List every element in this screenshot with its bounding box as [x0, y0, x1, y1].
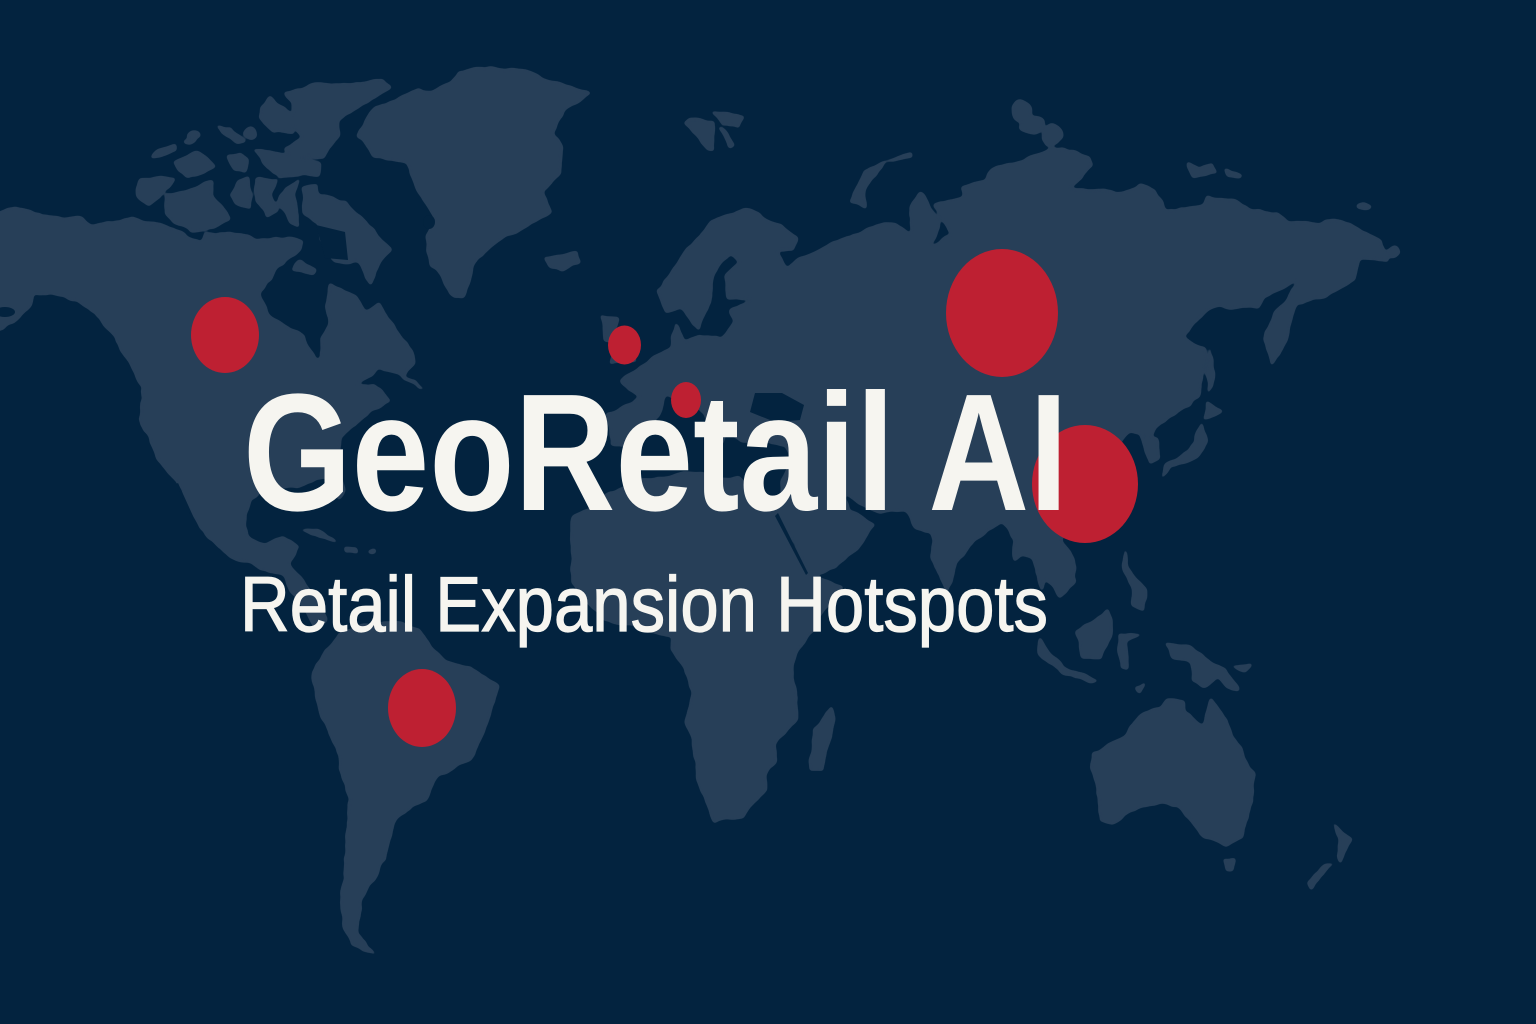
map: Tasmania	[1223, 858, 1234, 872]
map: Arctic Russia islands	[850, 102, 1399, 258]
hotspot: North America	[191, 297, 259, 373]
map: Greenland	[356, 67, 589, 297]
map: Australia	[1092, 698, 1255, 845]
map: Britain	[600, 315, 635, 365]
map: South America	[312, 622, 500, 955]
hotspot: Brazil	[388, 669, 456, 747]
title: GeoRetail AI	[243, 360, 1068, 546]
hotspot: United Kingdom	[608, 326, 641, 364]
expansion hotspots	[191, 249, 1138, 747]
map: Eurasia	[608, 147, 1390, 597]
subtitle: Retail Expansion Hotspots	[240, 560, 1048, 648]
world map	[0, 67, 1399, 955]
hotspot: China	[1032, 425, 1138, 543]
map: Svalbard	[686, 112, 745, 150]
map: Southeast Asia islands	[1038, 550, 1250, 692]
map: Sakhalin and Japan	[1140, 347, 1222, 480]
map: New Zealand	[1309, 823, 1351, 890]
map: Caribbean islands	[300, 529, 376, 553]
map: Africa	[569, 473, 843, 823]
map: Madagascar	[810, 707, 836, 770]
map: Arctic Archipelago	[137, 80, 392, 285]
map details: seas cut into the land	[0, 215, 808, 575]
map: Iceland	[545, 252, 580, 271]
hotspot: Southern Europe	[671, 382, 701, 418]
map: North and Central America	[0, 208, 423, 630]
hotspot: Central Asia	[946, 249, 1058, 377]
